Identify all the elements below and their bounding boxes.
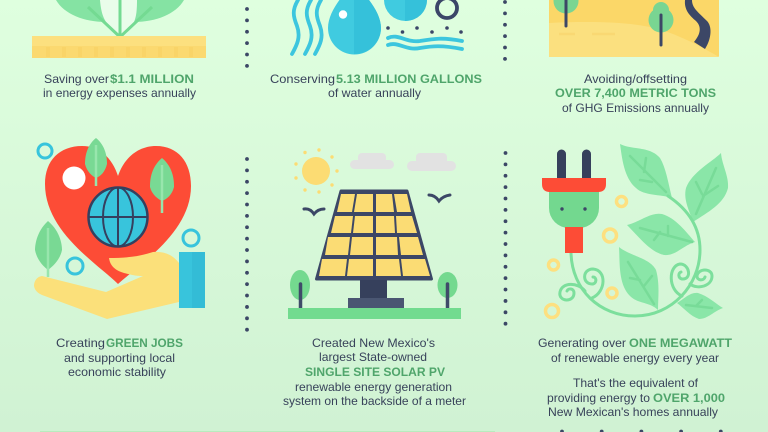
caption: water conservation (270, 72, 482, 100)
icon: landscape with trees and road (549, 0, 719, 57)
caption: water conservation: 5.13 MILLION GALLONS (336, 72, 482, 86)
caption: renewable megawatt: New Mexican's homes annually (548, 405, 718, 419)
caption: water conservation: of water annually (328, 86, 421, 100)
caption: solar pv: largest State-owned (319, 350, 427, 364)
icon: plant in soil (32, 0, 206, 58)
caption: solar pv: SINGLE SITE SOLAR PV (305, 365, 445, 379)
caption: solar pv (283, 336, 466, 408)
caption: green jobs: GREEN JOBS (106, 336, 183, 350)
icon: water drops and waves (292, 0, 463, 55)
icon: solar panel scene (288, 148, 461, 319)
caption: green jobs: economic stability (68, 365, 166, 379)
caption: renewable megawatt: providing energy to (547, 391, 650, 405)
caption: renewable megawatt: Generating over (538, 336, 626, 350)
panel: green jobs (34, 138, 205, 379)
caption: renewable megawatt (538, 336, 733, 419)
caption: energy savings: $1.1 MILLION (110, 72, 194, 86)
icon: heart, globe and hand (34, 138, 205, 319)
caption: green jobs: and supporting local (64, 351, 175, 365)
caption: energy savings: Saving over (44, 72, 109, 86)
caption: emissions avoided: Avoiding/offsetting (584, 72, 687, 86)
panel: emissions avoided (549, 0, 719, 115)
panel: water conservation (270, 0, 482, 100)
caption: renewable megawatt: of renewable energy every year (551, 351, 719, 365)
caption: emissions avoided: of GHG Emissions annually (562, 101, 709, 115)
caption: renewable megawatt: OVER 1,000 (653, 391, 725, 405)
caption: water conservation: Conserving (270, 72, 335, 86)
caption: renewable megawatt: ONE MEGAWATT (629, 336, 733, 350)
caption: green jobs: Creating (56, 336, 105, 350)
icon: plug with leafy vine (542, 144, 728, 319)
caption: renewable megawatt: That's the equivalent of (573, 376, 699, 390)
caption: solar pv: system on the backside of a meter (283, 394, 466, 408)
panel: solar pv (283, 148, 466, 408)
caption: solar pv: renewable energy generation (295, 380, 452, 394)
panel: renewable megawatt (538, 144, 733, 419)
caption: green jobs (56, 336, 183, 379)
caption: solar pv: Created New Mexico's (312, 336, 435, 350)
panel: energy savings (32, 0, 206, 100)
caption: energy savings (43, 72, 196, 100)
caption: emissions avoided (555, 72, 716, 115)
caption: emissions avoided: OVER 7,400 METRIC TONS (555, 86, 716, 100)
caption: energy savings: in energy expenses annually (43, 86, 196, 100)
